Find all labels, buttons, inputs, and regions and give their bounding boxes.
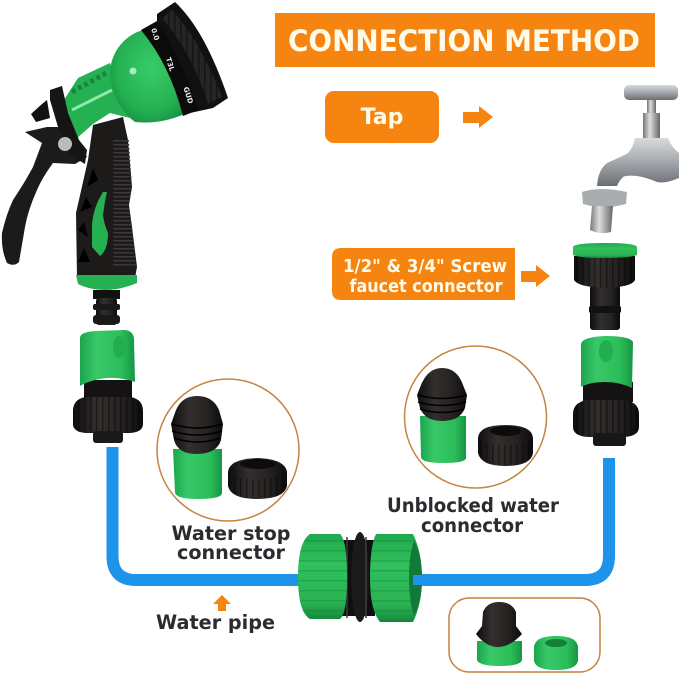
water pipe <box>112 447 609 580</box>
icon: spray gun <box>2 2 228 290</box>
label: unblocked water connector: Unblocked water <box>387 494 559 517</box>
arrow: faucet connector <box>521 265 550 287</box>
label: water stop connector <box>172 522 291 564</box>
left quick connector nipple <box>93 290 120 325</box>
knurled nut <box>582 189 627 207</box>
dial markings: T3L <box>164 56 176 73</box>
tap label <box>325 91 439 143</box>
trigger <box>2 127 87 265</box>
faucet connector label: faucet connector <box>350 276 503 297</box>
right water stop connector assembled <box>573 336 639 446</box>
centre pipe coupler <box>298 532 423 622</box>
label: water stop connector: Water stop <box>172 522 291 545</box>
spout body <box>597 138 679 186</box>
dial markings: 0.0 <box>149 27 161 42</box>
title banner: CONNECTION METHOD <box>288 24 640 58</box>
tap label: Tap <box>361 105 403 130</box>
rear knob <box>31 100 50 122</box>
arrow: water pipe <box>213 595 231 611</box>
label: unblocked water connector: connector <box>421 514 523 537</box>
panel: unblocked water connector <box>404 346 546 488</box>
icon: screw faucet connector <box>573 243 637 330</box>
green nut <box>534 636 578 670</box>
label: water pipe: Water pipe <box>156 611 275 634</box>
panel: green connector parts <box>449 598 600 672</box>
arrow: tap <box>463 106 493 128</box>
nozzle head <box>157 2 228 113</box>
icon: faucet <box>582 85 679 233</box>
neck <box>62 63 130 139</box>
left water stop connector assembled <box>73 330 143 443</box>
black nut <box>228 458 287 499</box>
label: water stop connector: connector <box>177 541 285 564</box>
black cap <box>417 368 467 421</box>
black nut <box>478 425 533 466</box>
faucet connector label <box>332 248 515 300</box>
handle <box>76 117 137 278</box>
green base <box>477 641 522 666</box>
black cap <box>171 396 223 454</box>
handle grip <box>92 192 108 256</box>
label: unblocked water connector <box>387 494 559 537</box>
green sleeve <box>173 449 222 499</box>
handle collar <box>76 275 137 290</box>
barb <box>590 206 613 233</box>
dial ring <box>141 21 198 116</box>
pivot pin <box>58 137 72 151</box>
bracket <box>50 86 87 164</box>
dial markings <box>149 27 194 105</box>
title banner <box>275 13 655 67</box>
panel: water stop connector <box>157 379 299 521</box>
black top <box>476 602 522 647</box>
dial markings: GUD <box>181 86 194 105</box>
faucet connector label: 1/2" & 3/4" Screw <box>343 256 507 277</box>
handle <box>624 85 678 100</box>
green bulb <box>110 30 185 123</box>
green sleeve <box>420 416 466 463</box>
